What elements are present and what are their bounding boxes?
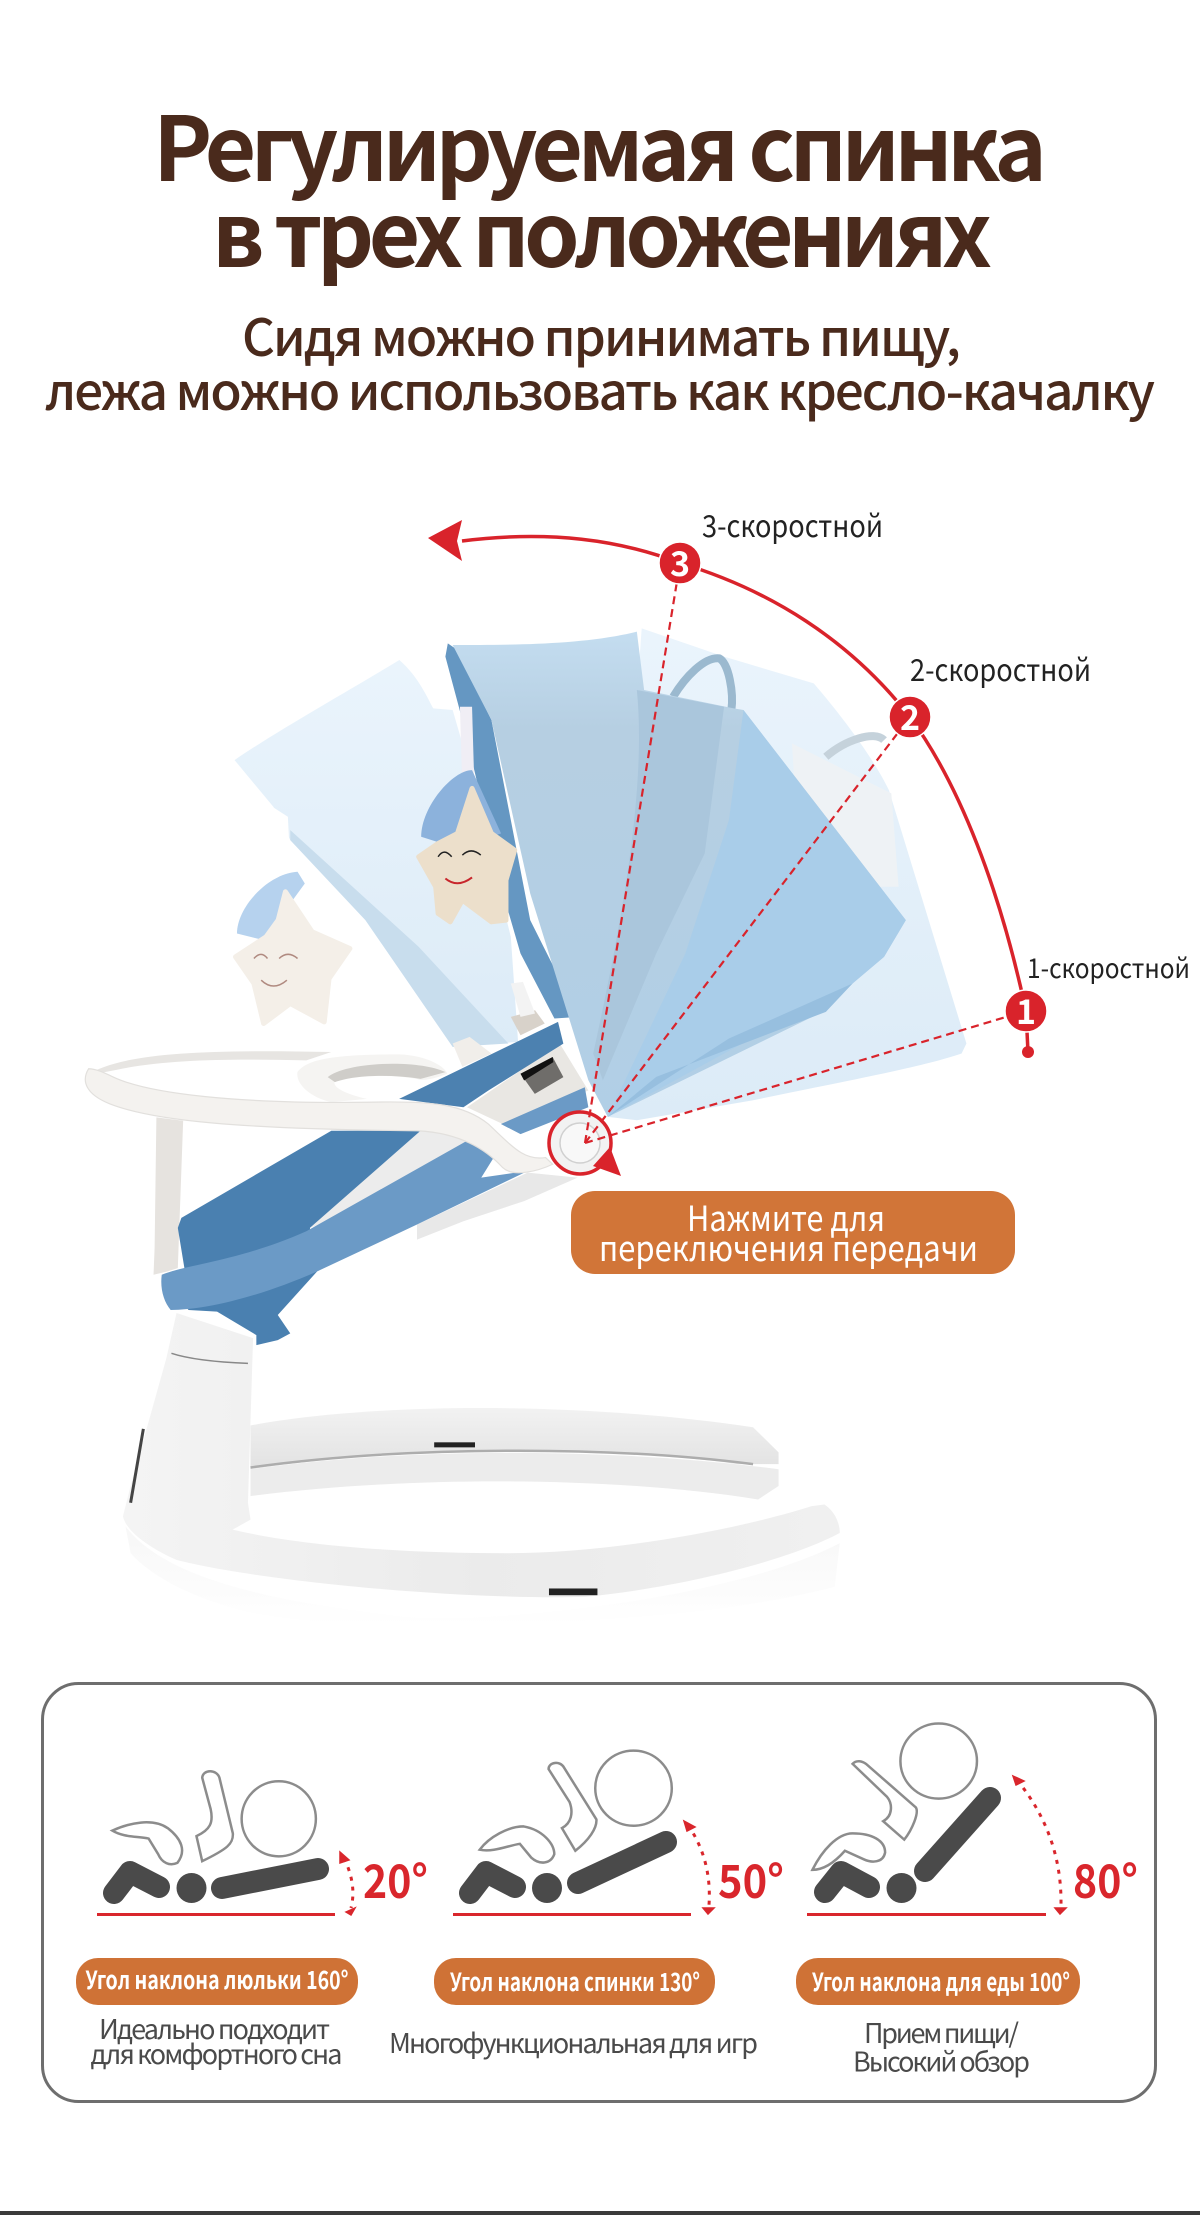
icon: 50 degree recline: 50° [718, 1846, 784, 1912]
subtitle [45, 297, 1155, 425]
text: feeding: Прием пищи/ [864, 2012, 1019, 2051]
rocker base [123, 1313, 840, 1626]
pill: backrest angle: Угол наклона спинки 130° [450, 1963, 700, 1999]
position marker 2 [889, 691, 931, 740]
backrest adjust knob [550, 1113, 610, 1173]
bottom edge band [0, 2211, 1200, 2215]
text: sleep: для комфортного сна [90, 2033, 342, 2072]
faded rear canopies [235, 628, 966, 1120]
callout: press to change: переключения передачи [599, 1221, 978, 1272]
canopy hinge [453, 982, 545, 1067]
subtitle: Сидя можно принимать пищу, [242, 297, 961, 371]
icon: 80 degree recline: 80° [1073, 1846, 1138, 1912]
icon: 20 degree recline: 20° [363, 1846, 428, 1912]
pill: backrest angle [434, 1958, 715, 2005]
position marker 3 [659, 537, 701, 586]
knob highlight ring and arrow [549, 1112, 621, 1176]
text: sleep [90, 2008, 342, 2072]
main canopy [445, 632, 906, 1117]
icon: 80 degree recline [807, 1724, 1138, 1914]
tray pole [154, 1117, 183, 1275]
callout: press to change [571, 1191, 1015, 1274]
position marker 1: 1 [1016, 985, 1036, 1034]
callout: press to change: Нажмите для [687, 1191, 885, 1242]
text: play: Многофункциональная для игр [389, 2022, 758, 2061]
pill: cradle angle [76, 1958, 358, 2005]
position marker 1 [1005, 985, 1047, 1034]
toy: star right [419, 707, 515, 922]
title: в трех положениях [212, 164, 992, 293]
text: sleep: Идеально подходит [99, 2008, 330, 2047]
subtitle: лежа можно использовать как кресло-качалку [45, 351, 1155, 425]
label: speed 3: 3-скоростной [702, 502, 883, 546]
tray [85, 1051, 553, 1173]
position marker 2: 2 [900, 691, 920, 740]
product illustration: baby swing [85, 628, 966, 1626]
rotation arc with arrow [428, 520, 1034, 1058]
title [153, 78, 1047, 293]
seat fabric [161, 1022, 588, 1345]
toy: star left [236, 807, 350, 1024]
text: feeding [853, 2012, 1030, 2080]
title: Регулируемая спинка [153, 78, 1047, 207]
dashed position lines [585, 563, 1026, 1143]
pill: feeding angle [796, 1958, 1080, 2005]
text: feeding: Высокий обзор [853, 2040, 1030, 2080]
label: speed 2: 2-скоростной [910, 646, 1091, 690]
pill: cradle angle: Угол наклона люльки 160° [86, 1961, 348, 1997]
panel: recline angles [42, 1684, 1156, 2102]
position marker 3: 3 [670, 537, 690, 586]
icon: 50 degree recline [453, 1751, 784, 1914]
pill: feeding angle: Угол наклона для еды 100° [812, 1963, 1070, 1999]
icon: 20 degree recline [97, 1771, 428, 1915]
